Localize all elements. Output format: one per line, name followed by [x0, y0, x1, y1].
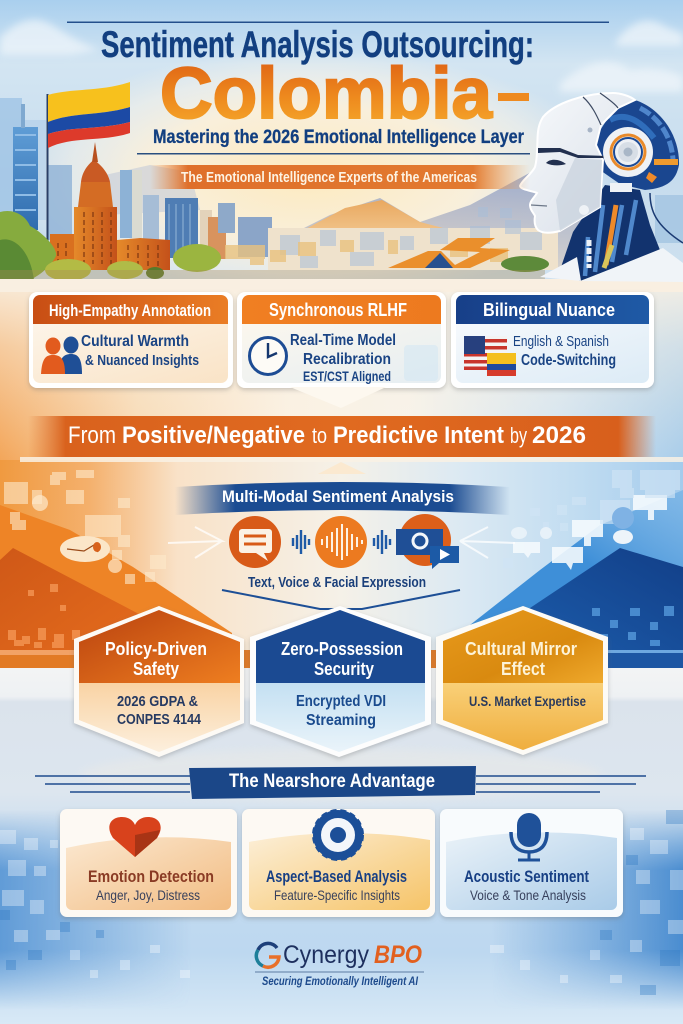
- panel: bilingual nuance: Bilingual Nuance: [483, 300, 615, 320]
- icon: US flag: [464, 336, 507, 370]
- ear ring: [603, 127, 653, 177]
- icon: robot head: [520, 93, 683, 282]
- icon: Colombia flag: [487, 353, 516, 376]
- icon: voice waves left: [293, 530, 309, 554]
- face and cranium: [520, 93, 635, 233]
- icon: heart: [109, 817, 161, 857]
- collar plates: [540, 257, 581, 281]
- hexagon: zero-possession security: Zero-Possession: [281, 638, 403, 659]
- banner: predictive intent: Positive/Negative: [122, 422, 305, 449]
- caption: modalities: Text, Voice & Facial Expression: [248, 574, 426, 591]
- hexagon: policy-driven safety: Safety: [133, 658, 180, 679]
- banner: the nearshore advantage: [35, 766, 646, 799]
- panel: high-empathy annotation: High-Empathy Annotation: [49, 301, 211, 320]
- slope orange: [0, 505, 232, 668]
- banner: predictive intent: by: [510, 423, 527, 448]
- panel: synchronous RLHF: [237, 292, 446, 408]
- trees: [0, 211, 549, 281]
- icon: Colombian flag: [46, 82, 130, 246]
- banner: predictive intent: Predictive Intent: [333, 422, 504, 449]
- fade at scene bottom: [0, 279, 683, 292]
- icon: text chat: [229, 516, 281, 568]
- city mosaic: [268, 228, 558, 270]
- mountain dark orange: [0, 548, 170, 668]
- title line 1: Sentiment Analysis Outsourcing:: [101, 24, 534, 65]
- hexagon: zero-possession security: [250, 606, 431, 757]
- hexagon: zero-possession security: Encrypted VDI: [296, 693, 386, 710]
- hexagon: cultural mirror effect: U.S. Market Expertise: [469, 693, 586, 709]
- connector chevron: [222, 590, 460, 609]
- panel: aspect-based analysis: Feature-Specific Insights: [274, 887, 400, 903]
- mosaic pixels navy mountain: [570, 606, 674, 646]
- hexagon: cultural mirror effect: Effect: [501, 658, 545, 679]
- logo: Cynergy BPO: Cynergy: [283, 941, 369, 969]
- hexagon: policy-driven safety: Policy-Driven: [105, 638, 207, 659]
- icon: voice circle: [315, 516, 367, 568]
- hexagon: cultural mirror effect: Cultural Mirror: [465, 638, 577, 659]
- panel: synchronous RLHF: Recalibration: [303, 351, 391, 368]
- panel: emotion detection: [60, 809, 237, 917]
- eye and brow: [538, 148, 608, 158]
- sun glow: [10, 50, 610, 300]
- panel: high-empathy annotation: Cultural Warmth: [81, 333, 189, 350]
- banner: predictive intent: [28, 416, 656, 457]
- banner: predictive intent: From: [68, 422, 116, 449]
- banner: predictive intent: to: [312, 423, 327, 448]
- tagline ribbon: [150, 165, 530, 189]
- logo: Cynergy BPO: [255, 941, 424, 988]
- banner: multi-modal sentiment analysis: Multi-Modal Sentiment Analysis: [222, 487, 454, 506]
- skyline: [0, 98, 683, 259]
- icon: clock: [250, 338, 286, 374]
- panel: synchronous RLHF: Real-Time Model: [290, 332, 396, 349]
- panel: aspect-based analysis: [242, 809, 435, 917]
- panel: high-empathy annotation: & Nuanced Insights: [85, 352, 199, 369]
- icon: map oval: [60, 536, 110, 562]
- icon: logo ring: [256, 943, 279, 967]
- mosaic speech bubbles right: [513, 495, 667, 570]
- panel: acoustic sentiment: [440, 809, 623, 917]
- tagline ribbon: The Emotional Intelligence Experts of the Americas: [181, 169, 477, 186]
- terracotta tower: [50, 142, 170, 270]
- banner: multi-modal sentiment analysis: [175, 482, 510, 515]
- panel: bilingual nuance: English & Spanish: [513, 333, 609, 350]
- icon: clouds: [0, 20, 683, 92]
- panel: emotion detection: Emotion Detection: [88, 868, 214, 886]
- hexagon: cultural mirror effect: [436, 606, 608, 755]
- hexagon: policy-driven safety: [74, 606, 244, 757]
- mosaic pale squares left: [4, 470, 166, 584]
- shoulder outline: [650, 193, 683, 243]
- arrow: into multi-modal section: [318, 462, 366, 474]
- subtitle: Mastering the 2026 Emotional Intelligence Layer: [153, 127, 525, 148]
- orange roof buildings: [388, 238, 510, 268]
- hexagon: policy-driven safety: 2026 GDPA &: [117, 694, 198, 710]
- mosaic pixels lower: [0, 828, 683, 983]
- panel: aspect-based analysis: Aspect-Based Analysis: [266, 868, 407, 886]
- title dash: [498, 93, 529, 101]
- title block: [67, 22, 609, 154]
- icon: facial video: [396, 514, 459, 569]
- panel: high-empathy annotation: [29, 292, 233, 388]
- mountains: [280, 170, 600, 270]
- logo: Cynergy BPO: BPO: [374, 941, 422, 969]
- icon: microphone: [511, 813, 547, 860]
- panel: bilingual nuance: [451, 292, 654, 388]
- arrows: convergence lines: [168, 527, 515, 558]
- ground strip: [0, 270, 545, 280]
- banner: the nearshore advantage: The Nearshore Advantage: [229, 770, 435, 792]
- hexagon: zero-possession security: Streaming: [306, 712, 376, 729]
- panel: emotion detection: Anger, Joy, Distress: [96, 887, 200, 903]
- panel: acoustic sentiment: Voice & Tone Analysis: [470, 887, 586, 903]
- icon: people: [41, 336, 82, 374]
- title: Colombia: Colombia: [160, 54, 493, 134]
- panel: synchronous RLHF: EST/CST Aligned: [303, 368, 391, 384]
- logo: Cynergy BPO: Securing Emotionally Intelligent AI: [262, 974, 419, 988]
- panel: synchronous RLHF: Synchronous RLHF: [269, 300, 407, 320]
- panel: bilingual nuance: Code-Switching: [521, 352, 616, 369]
- neck: [560, 185, 660, 281]
- mosaic pixels orange mountain: [8, 584, 80, 648]
- panel: acoustic sentiment: Acoustic Sentiment: [464, 868, 589, 886]
- slope mid blue: [440, 490, 683, 668]
- banner: predictive intent: 2026: [532, 422, 586, 449]
- icon: voice waves right: [374, 530, 390, 554]
- hexagon: policy-driven safety: CONPES 4144: [117, 712, 201, 728]
- icon: gear: [314, 810, 362, 860]
- mountain navy: [470, 548, 683, 668]
- hexagon: zero-possession security: Security: [314, 658, 375, 679]
- header scene illustration: [0, 20, 683, 300]
- back of head: [597, 100, 679, 190]
